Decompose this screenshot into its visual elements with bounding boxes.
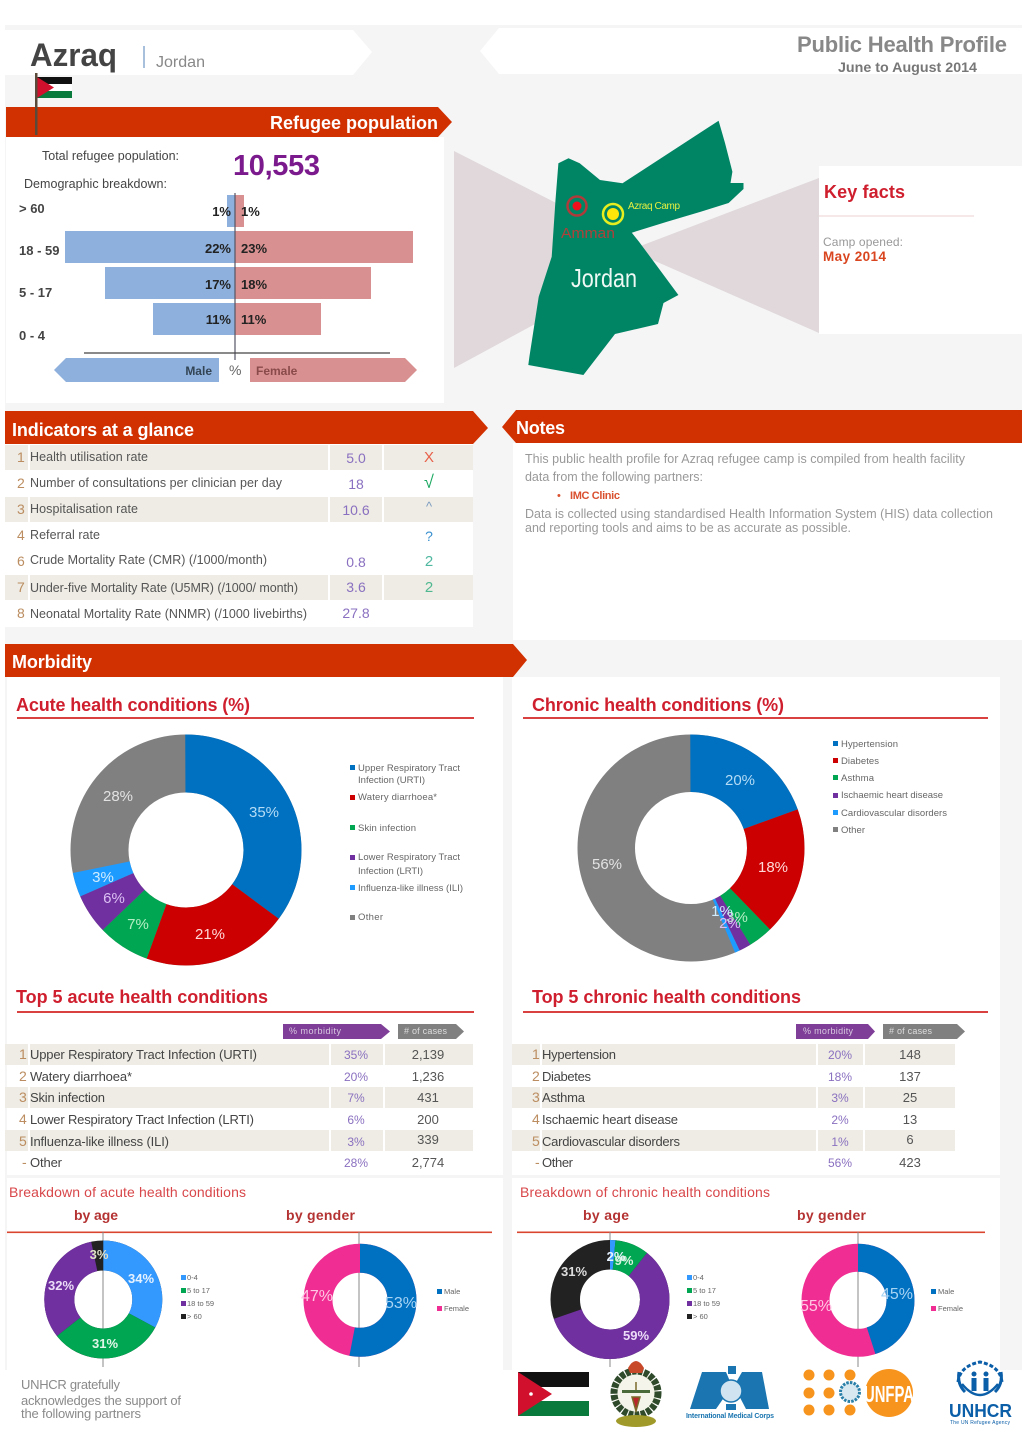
row 2: 2 [532,1068,540,1084]
row 4: 4 [532,1111,540,1127]
legend: chronic conditions: Hypertension [841,739,898,750]
logo: UNHCR [949,1362,1012,1426]
notes text: • [557,490,561,502]
total value: 10,553 [233,150,320,182]
panel: report title banner [480,28,1022,75]
donut chart: chronic by age [561,1232,655,1367]
row 4 [532,1111,917,1127]
panel: top 5 acute conditions [5,987,474,1170]
legend: chronic by age: 0-4 [693,1273,704,1282]
row other: 56% [828,1156,852,1170]
column tag: percent morbidity [283,1024,390,1039]
donut chart: acute by age: 34% [128,1271,154,1286]
legend: acute by age [181,1273,214,1321]
row 1: 2,139 [412,1047,444,1062]
legend: acute conditions: Skin infection [358,823,416,834]
label: Amman: Amman [561,225,615,242]
donut chart: chronic by gender: 55% [800,1298,832,1315]
population pyramid [19,193,413,360]
row 4: 200 [417,1112,439,1127]
population pyramid: 11% [241,312,267,327]
population pyramid: 11% [206,312,231,327]
reporting period: June to August 2014 [838,59,977,75]
column separators [540,1044,865,1151]
acknowledgement text [21,1377,181,1421]
acknowledgement text: the following partners [21,1406,142,1421]
donut chart: acute by age: 32% [48,1278,74,1293]
panel: notes [502,410,1022,640]
donut chart: acute by age: 31% [92,1336,118,1351]
legend: chronic conditions: Ischaemic heart disease [841,790,943,801]
row 3: 3 [532,1089,540,1105]
legend: chronic by age: > 60 [693,1312,708,1321]
row 3: Asthma [542,1090,586,1105]
panel background [819,166,1022,334]
row 2: 1,236 [412,1069,444,1084]
panel: key facts [819,166,1022,334]
donut labels: chronic: 3% [726,909,748,926]
row: consultations: 2 [17,475,25,491]
panel: breakdown of acute conditions background [7,1178,503,1370]
country name: Jordan [156,54,205,71]
heading rule [17,1011,474,1013]
legend: acute conditions: Lower Respiratory Tract [358,852,460,863]
legend: female [250,358,417,382]
row other [535,1154,921,1170]
panel background [5,444,473,627]
row 4: 13 [903,1112,917,1127]
donut labels: chronic: 1% [711,903,733,920]
donut labels: acute: 28% [103,788,133,805]
row: referral: Referral rate [30,528,100,542]
column tag: percent morbidity: % morbidity [289,1026,342,1036]
donut chart: acute by age: 3% [90,1247,109,1262]
row 3: 3 [19,1089,27,1105]
section heading: Refugee population [270,113,438,133]
row 3: 7% [347,1091,365,1105]
row: consultations: √ [424,472,434,492]
row: neonatal mortality: Neonatal Mortality Rate (NNMR) (/1000 livebirths) [30,607,307,621]
section banner: morbidity: Morbidity [12,652,92,672]
heading: breakdown of chronic conditions: by gender [797,1207,867,1223]
panel: acute conditions background [7,677,503,1175]
logo: UNFPA: UNFPA [864,1381,914,1407]
banner shape [480,28,1022,74]
row 5 [19,1132,439,1149]
row 3 [532,1089,917,1105]
row 1: 148 [899,1047,921,1062]
notes text: data from the following partners: [525,470,703,484]
row 1: Upper Respiratory Tract Infection (URTI) [30,1047,257,1062]
donut chart: chronic by gender [800,1232,913,1367]
legend: acute conditions: Upper Respiratory Tract [358,763,460,774]
row 4: Ischaemic heart disease [542,1112,678,1127]
row 1: 1 [19,1046,27,1062]
row: consultations: 18 [348,476,364,492]
donut labels: acute: 21% [195,926,225,943]
total label: Total refugee population: [42,149,179,163]
row other: Other [30,1155,63,1170]
row: under-five mortality: 7 [17,579,25,595]
legend: acute by age: 18 to 59 [187,1299,214,1308]
donut labels: chronic: 18% [758,859,788,876]
row 3 [19,1089,439,1105]
legend: female: Female [256,364,298,378]
legend: acute by gender: Female [444,1304,469,1313]
logo: UNFPA [804,1369,914,1417]
donut labels: chronic [592,772,788,932]
column tag: number of cases [398,1024,464,1039]
row 5: 5 [532,1133,540,1149]
notes text: IMC Clinic [570,490,620,502]
divider [819,216,974,217]
row 2: Diabetes [542,1069,592,1084]
heading: breakdown of chronic conditions: by age [583,1207,629,1223]
population pyramid: 18 - 59 [19,243,59,258]
row: hospitalisation: ^ [426,499,433,514]
heading: breakdown of acute conditions: Breakdown of acute health conditions [9,1184,246,1200]
row other: 423 [899,1155,921,1170]
legend: chronic by gender: Female [938,1304,963,1313]
donut chart: acute by gender: 53% [385,1295,417,1312]
legend: acute conditions: Other [358,912,383,923]
row 1: Hypertension [542,1047,616,1062]
legend: chronic conditions: Other [841,825,865,836]
column separators [28,445,384,600]
row: crude mortality [17,553,433,570]
population pyramid: 1% [212,204,231,219]
panel: indicators at a glance [5,411,488,627]
donut labels: acute: 3% [92,869,114,886]
row: referral [17,527,433,544]
panel: top 5 chronic conditions [512,987,988,1170]
row: neonatal mortality: 27.8 [342,605,370,621]
row other: 28% [344,1156,368,1170]
section banner [5,411,488,444]
row: consultations: Number of consultations per clinician per day [30,476,283,490]
map callout wedge: left [454,151,570,368]
row: health utilisation: 5.0 [346,450,366,466]
row: crude mortality: 6 [17,553,25,569]
population pyramid: 18% [241,277,267,292]
row other: - [22,1154,27,1170]
legend: acute conditions: Watery diarrhoea* [358,792,437,803]
row 4: 6% [347,1113,365,1127]
row: health utilisation [17,449,434,466]
panel: partners strip [13,1370,1024,1430]
donut labels: acute [92,788,279,943]
banner shape [5,30,372,75]
legend: acute by gender: Male [444,1287,460,1296]
row 5: 3% [347,1135,365,1149]
donut chart: chronic by age: 31% [561,1264,587,1279]
notes text [525,452,993,535]
population pyramid: 1% [241,204,260,219]
population pyramid: > 60 [19,201,45,216]
row: hospitalisation: 3 [17,501,25,517]
heading: breakdown of acute conditions: by gender [286,1207,356,1223]
logo: UNHCR: The UN Refugee Agency [950,1420,1010,1426]
row 3: 431 [417,1090,439,1105]
marker: Amman [568,196,586,216]
row: hospitalisation: 10.6 [342,502,370,518]
row other: Other [542,1155,574,1170]
legend: chronic by age: 18 to 59 [693,1299,720,1308]
panel: refugee population [6,107,452,403]
acknowledgement text: UNHCR gratefully [21,1377,120,1392]
section heading: Notes [516,418,565,438]
legend: chronic by gender: Male [938,1287,954,1296]
row: neonatal mortality [17,605,370,621]
donut chart: acute by gender [301,1232,417,1367]
row 1: 35% [344,1048,368,1062]
acknowledgement text: acknowledges the support of [21,1393,181,1408]
map callout wedge: right [630,178,819,333]
row other [22,1154,444,1170]
camp opened label: Camp opened: [823,235,903,249]
panel background [513,443,1022,640]
title divider [143,46,145,68]
donut chart: chronic by age: 59% [623,1328,649,1343]
row 2: 2 [19,1068,27,1084]
panel background [6,137,444,403]
population pyramid: 17% [205,277,231,292]
row 3: 3% [831,1091,849,1105]
legend: acute by age: > 60 [187,1312,202,1321]
breakdown label: Demographic breakdown: [24,177,167,191]
row: hospitalisation: Hospitalisation rate [30,502,138,516]
row: hospitalisation [17,499,433,518]
heading: Top 5 chronic health conditions [532,987,801,1007]
row 5: 6 [906,1132,914,1147]
legend: acute conditions [350,763,463,923]
notes text: and reporting tools and aims to be as accurate as possible. [525,521,851,535]
row: crude mortality: Crude Mortality Rate (CMR) (/1000/month) [30,553,267,567]
row 2: 18% [828,1070,852,1084]
row: referral: ? [425,528,433,544]
donut labels: chronic: 2% [719,915,741,932]
donut labels: chronic: 56% [592,856,622,873]
row 1 [19,1046,444,1062]
row other: 2,774 [412,1155,444,1170]
donut chart: acute conditions [100,764,272,936]
population pyramid: 5 - 17 [19,285,52,300]
donut chart: acute by gender: 47% [301,1288,333,1305]
column tag: percent morbidity: % morbidity [803,1026,854,1036]
row 4: 2% [831,1113,849,1127]
column tag: number of cases [883,1024,965,1039]
legend: acute by age: 5 to 17 [187,1286,210,1295]
notes text: This public health profile for Azraq refugee camp is compiled from health facility [525,452,966,466]
population pyramid: 23% [241,241,267,256]
shaded table rows [512,1044,955,1151]
legend: chronic by age [687,1273,720,1321]
section banner [6,107,452,137]
row 1: 20% [828,1048,852,1062]
population pyramid: 0 - 4 [19,328,46,343]
row: under-five mortality: 2 [425,579,433,596]
row 1: 1 [532,1046,540,1062]
shaded table rows [5,445,473,600]
label: Jordan: Jordan [571,263,637,293]
legend: acute conditions: Infection (LRTI) [358,866,423,877]
column tag: percent morbidity [796,1024,875,1039]
heading: chronic health conditions: Chronic health conditions (%) [532,695,784,715]
row: neonatal mortality: 8 [17,605,25,621]
legend: percent: % [229,362,241,378]
label: Azraq Camp: Azraq Camp [628,201,680,212]
panel: breakdown of chronic conditions background [512,1178,1000,1370]
row: referral: 4 [17,527,25,543]
row 2: 137 [899,1069,921,1084]
logo: Jordan flag [518,1372,589,1416]
row other: - [535,1154,540,1170]
row 5: 5 [19,1133,27,1149]
donut labels: chronic: 20% [725,772,755,789]
donut chart: chronic by age: 2% [607,1249,626,1264]
donut chart: chronic conditions [606,763,776,933]
row: under-five mortality: 3.6 [346,579,366,595]
heading: Key facts [824,182,905,202]
row 3: 25 [903,1090,917,1105]
row: consultations [17,472,434,492]
legend: chronic by age: 5 to 17 [693,1286,716,1295]
legend: acute by gender [437,1287,469,1313]
donut chart: acute by age [48,1232,154,1367]
section banner [502,410,1022,443]
map of Jordan [528,121,744,375]
row: crude mortality: 0.8 [346,554,366,570]
legend: chronic conditions [833,739,947,836]
marker: Azraq Camp [603,204,623,224]
donut labels: acute: 6% [103,890,125,907]
legend: chronic conditions: Cardiovascular disorders [841,808,947,819]
row 2: Watery diarrhoea* [30,1069,132,1084]
donut labels: acute: 7% [127,916,149,933]
logo: International Medical Corps [686,1366,774,1420]
logo: UNHCR: UNHCR [949,1401,1012,1421]
column tag: number of cases: # of cases [404,1026,448,1036]
legend: acute conditions: Influenza-like illness (ILI) [358,883,463,894]
heading: Top 5 acute health conditions [16,987,268,1007]
row 2: 20% [344,1070,368,1084]
section banner: morbidity [5,644,527,677]
legend: male [54,358,219,382]
row: under-five mortality: Under-five Mortality Rate (U5MR) (/1000/ month) [30,581,298,595]
row 2 [532,1068,921,1084]
heading: breakdown of chronic conditions [517,1184,985,1233]
row: under-five mortality [17,579,433,596]
column tag: number of cases: # of cases [889,1026,932,1036]
row: crude mortality: 2 [425,553,433,570]
map shape [528,121,744,375]
notes text: Data is collected using standardised Health Information System (HIS) data collection [525,507,993,521]
icon: Jordan flag on pole [35,73,72,135]
panel: title banner [5,30,372,75]
donut chart: chronic by age: 9% [615,1253,634,1268]
population pyramid: 22% [205,241,231,256]
heading: breakdown of acute conditions [7,1184,492,1233]
legend: chronic conditions: Asthma [841,773,875,784]
logo: International Medical Corps: International Medical Corps [686,1413,774,1420]
legend: acute conditions: Infection (URTI) [358,775,425,786]
heading: breakdown of acute conditions: by age [74,1207,118,1223]
panel: chronic conditions background [512,677,1000,1175]
row 4: 4 [19,1111,27,1127]
row: health utilisation: 1 [17,449,25,465]
legend: chronic by gender [931,1287,963,1313]
row 4 [19,1111,439,1127]
row 5: Cardiovascular disorders [542,1134,680,1149]
donut labels: acute: 35% [249,804,279,821]
row 5: Influenza-like illness (ILI) [30,1134,169,1149]
row: health utilisation: X [424,449,434,466]
report title: Public Health Profile [797,32,1007,57]
section heading: Indicators at a glance [12,420,194,440]
row 5: 339 [417,1132,439,1147]
title: Azraq [30,37,117,73]
heading rule [523,1011,988,1013]
column separators [28,1044,385,1151]
row 5 [532,1132,914,1149]
heading: acute health conditions: Acute health conditions (%) [16,695,250,715]
shaded table rows [5,1044,473,1151]
row 4: Lower Respiratory Tract Infection (LRTI) [30,1112,254,1127]
row 3: Skin infection [30,1090,105,1105]
row 5: 1% [831,1135,849,1149]
legend: chronic conditions: Diabetes [841,756,879,767]
camp opened value: May 2014 [823,249,886,264]
row 1 [532,1046,921,1062]
legend: acute by age: 0-4 [187,1273,198,1282]
donut chart: chronic by gender: 45% [881,1286,913,1303]
legend: male: Male [185,364,212,378]
row 2 [19,1068,444,1084]
row: health utilisation: Health utilisation rate [30,450,148,464]
heading: breakdown of chronic conditions: Breakdown of chronic health conditions [520,1184,770,1200]
logo: ministry emblem [614,1361,658,1427]
